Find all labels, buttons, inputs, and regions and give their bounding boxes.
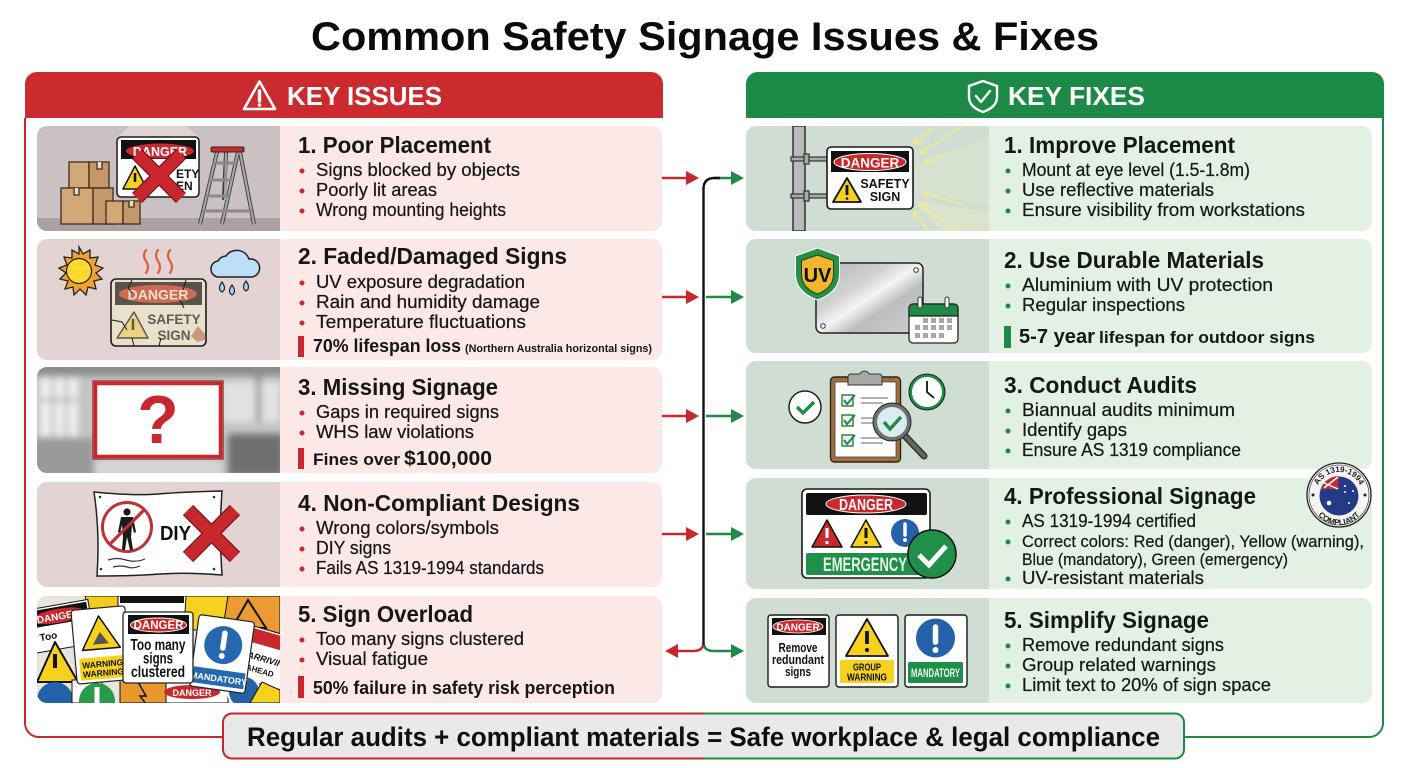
- fix 2: durable materials: [746, 239, 1372, 353]
- illustration: mounted sign with light: [746, 126, 989, 231]
- stat callout: $100,000: [404, 448, 492, 470]
- bullets: Use reflective materials: [1022, 180, 1214, 200]
- heading: 3. Conduct Audits: [1004, 372, 1197, 398]
- illustration: DIY sign: DIY: [160, 523, 192, 545]
- bullets: Too many signs clustered: [316, 629, 524, 649]
- issue 2: faded damaged signs: [37, 239, 662, 360]
- illustration: simplified signs: redundant: [772, 652, 825, 667]
- stat callout: [1004, 326, 1315, 348]
- illustration: weathered sign: DANGER: [128, 286, 188, 302]
- bullets: Temperature fluctuations: [316, 312, 526, 332]
- bullets: [1006, 511, 1364, 588]
- title: Common Safety Signage Issues & Fixes: [311, 15, 1099, 59]
- heading: 1. Improve Placement: [1004, 132, 1235, 158]
- heading: 3. Missing Signage: [298, 374, 498, 400]
- bullets: UV-resistant materials: [1022, 568, 1204, 588]
- illustration: aluminium plate, UV shield, calendar: [746, 239, 989, 353]
- bullets: Blue (mandatory), Green (emergency): [1022, 550, 1288, 569]
- illustration: cluttered signs: WARNING: [83, 666, 125, 680]
- header: key fixes: KEY FIXES: [1008, 81, 1145, 111]
- black connector: [704, 178, 720, 646]
- badge: AS compliant seal: AS 1319-1994: [1314, 466, 1364, 485]
- badge: AS compliant seal: [1306, 462, 1372, 528]
- panel: key fixes: [746, 72, 1384, 738]
- bullets: Group related warnings: [1022, 655, 1216, 675]
- illustration: cluttered signs: DANGER: [36, 608, 81, 626]
- bullets: [300, 272, 540, 332]
- callout: summary: [223, 714, 1184, 758]
- stat callout: 5-7 year: [1019, 326, 1095, 348]
- illustration: compliant sign: [746, 478, 989, 589]
- illustration: weathered sign: SIGN: [157, 328, 191, 343]
- illustration: cluttered signs: AHEAD: [245, 663, 275, 679]
- illustration: cluttered signs: [37, 596, 280, 703]
- bullets: AS 1319-1994 certified: [1022, 511, 1196, 531]
- bullets: [300, 402, 499, 442]
- bullets: Wrong mounting heights: [316, 200, 506, 220]
- callout: summary: Regular audits + compliant materials = Safe workplace & legal compliance: [247, 722, 1160, 752]
- bullets: Wrong colors/symbols: [316, 518, 499, 538]
- illustration: blocked sign: ETY: [176, 167, 199, 181]
- issue 5: sign overload: [37, 596, 662, 703]
- illustration: simplified signs: MANDATORY: [911, 668, 960, 680]
- bullets: [1006, 635, 1271, 695]
- illustration: blocked sign: DANGER: [133, 145, 187, 159]
- illustration: weathered sign: SAFETY: [147, 312, 201, 327]
- illustration: audit checklist: [746, 361, 989, 469]
- bullets: [1006, 160, 1305, 220]
- bullets: Ensure visibility from workstations: [1022, 200, 1305, 220]
- heading: 5. Sign Overload: [298, 601, 473, 627]
- green arrows: [704, 171, 744, 658]
- fix 1: improve placement: [746, 126, 1372, 231]
- bullets: Gaps in required signs: [316, 402, 499, 422]
- header: key fixes: [746, 72, 1384, 118]
- bullets: [300, 629, 524, 669]
- bullets: Rain and humidity damage: [316, 292, 540, 312]
- bullets: Correct colors: Red (danger), Yellow (warning),: [1022, 532, 1364, 551]
- heading: 2. Use Durable Materials: [1004, 247, 1264, 273]
- stat callout: (Northern Australia horizontal signs): [465, 343, 652, 355]
- heading: 1. Poor Placement: [298, 132, 491, 158]
- illustration: compliant sign: EMERGENCY: [823, 555, 907, 576]
- bullets: Signs blocked by objects: [316, 160, 520, 180]
- panel: key issues: [25, 72, 663, 737]
- illustration: missing sign: [37, 367, 280, 473]
- issue 3: missing signage: [37, 367, 662, 473]
- header: key issues: [25, 72, 663, 118]
- illustration: cluttered signs: WARNING: [82, 657, 124, 671]
- bullets: Remove redundant signs: [1022, 635, 1224, 655]
- bullets: [300, 518, 544, 578]
- illustration: blocked sign: EN: [176, 179, 193, 193]
- bullets: Ensure AS 1319 compliance: [1022, 440, 1241, 460]
- illustration: simplified signs: DANGER: [776, 622, 820, 634]
- bullets: DIY signs: [316, 538, 391, 558]
- issue 1: poor placement: [37, 126, 662, 231]
- bullets: Visual fatigue: [316, 649, 428, 669]
- fix 5: simplify signage: [746, 598, 1372, 703]
- illustration: cluttered signs: DANGER: [134, 620, 184, 632]
- illustration: cluttered signs: DANGER: [172, 688, 212, 698]
- stat callout: Fines over: [313, 450, 400, 469]
- illustration: DIY sign: [37, 482, 280, 587]
- stat callout: lifespan for outdoor signs: [1099, 328, 1315, 347]
- illustration: cluttered signs: signs: [143, 650, 173, 668]
- arrows: issues to fixes: [662, 171, 744, 658]
- illustration: mounted sign with light: SAFETY: [860, 177, 910, 191]
- illustration: aluminium plate, UV shield, calendar: UV: [804, 265, 832, 287]
- bullets: Biannual audits minimum: [1022, 400, 1235, 420]
- bullets: [300, 160, 520, 220]
- bullets: Poorly lit areas: [316, 180, 437, 200]
- icon: warning triangle: [244, 82, 275, 109]
- illustration: weathered sign: [37, 239, 280, 360]
- bullets: Aluminium with UV protection: [1022, 275, 1273, 295]
- illustration: cluttered signs: ARRIVING: [245, 649, 291, 671]
- bullets: Identify gaps: [1022, 420, 1127, 440]
- illustration: compliant sign: DANGER: [839, 497, 893, 514]
- illustration: cluttered signs: Too: [39, 630, 58, 644]
- illustration: simplified signs: WARNING: [847, 672, 887, 684]
- illustration: simplified signs: Remove: [778, 640, 818, 655]
- illustration: blocked sign: [37, 126, 280, 231]
- bullets: UV exposure degradation: [316, 272, 525, 292]
- heading: 4. Non-Compliant Designs: [298, 490, 580, 516]
- illustration: simplified signs: GROUP: [853, 662, 881, 674]
- illustration: cluttered signs: clustered: [131, 664, 185, 681]
- fix 4: professional signage: [746, 462, 1372, 589]
- illustration: simplified signs: [746, 598, 989, 703]
- bullets: WHS law violations: [316, 422, 474, 442]
- illustration: missing sign: ?: [137, 382, 179, 458]
- header: key issues: KEY ISSUES: [287, 81, 442, 111]
- bullets: Mount at eye level (1.5-1.8m): [1022, 160, 1250, 180]
- bullets: Fails AS 1319-1994 standards: [316, 558, 544, 578]
- heading: 4. Professional Signage: [1004, 483, 1256, 509]
- bullets: [1006, 275, 1273, 315]
- issue 4: non-compliant designs: [37, 482, 662, 587]
- bullets: [1006, 400, 1241, 460]
- badge: AS compliant seal: COMPLIANT: [1319, 511, 1358, 526]
- stat callout: [298, 336, 652, 357]
- illustration: simplified signs: signs: [785, 664, 811, 679]
- stat callout: [298, 448, 492, 470]
- heading: 2. Faded/Damaged Signs: [298, 243, 567, 269]
- icon: shield check: [969, 81, 997, 112]
- illustration: mounted sign with light: SIGN: [870, 190, 900, 204]
- fix 3: conduct audits: [746, 361, 1372, 469]
- illustration: mounted sign with light: DANGER: [841, 156, 899, 170]
- red return arrow: [665, 644, 703, 658]
- stat callout: 70% lifespan loss: [313, 336, 461, 356]
- heading: 5. Simplify Signage: [1004, 607, 1209, 633]
- illustration: cluttered signs: MANDATORY: [189, 670, 248, 688]
- bullets: Limit text to 20% of sign space: [1022, 675, 1271, 695]
- stat callout: 50% failure in safety risk perception: [313, 678, 615, 698]
- red arrows: [662, 171, 699, 541]
- bullets: Regular inspections: [1022, 295, 1185, 315]
- illustration: cluttered signs: Too many: [130, 637, 186, 654]
